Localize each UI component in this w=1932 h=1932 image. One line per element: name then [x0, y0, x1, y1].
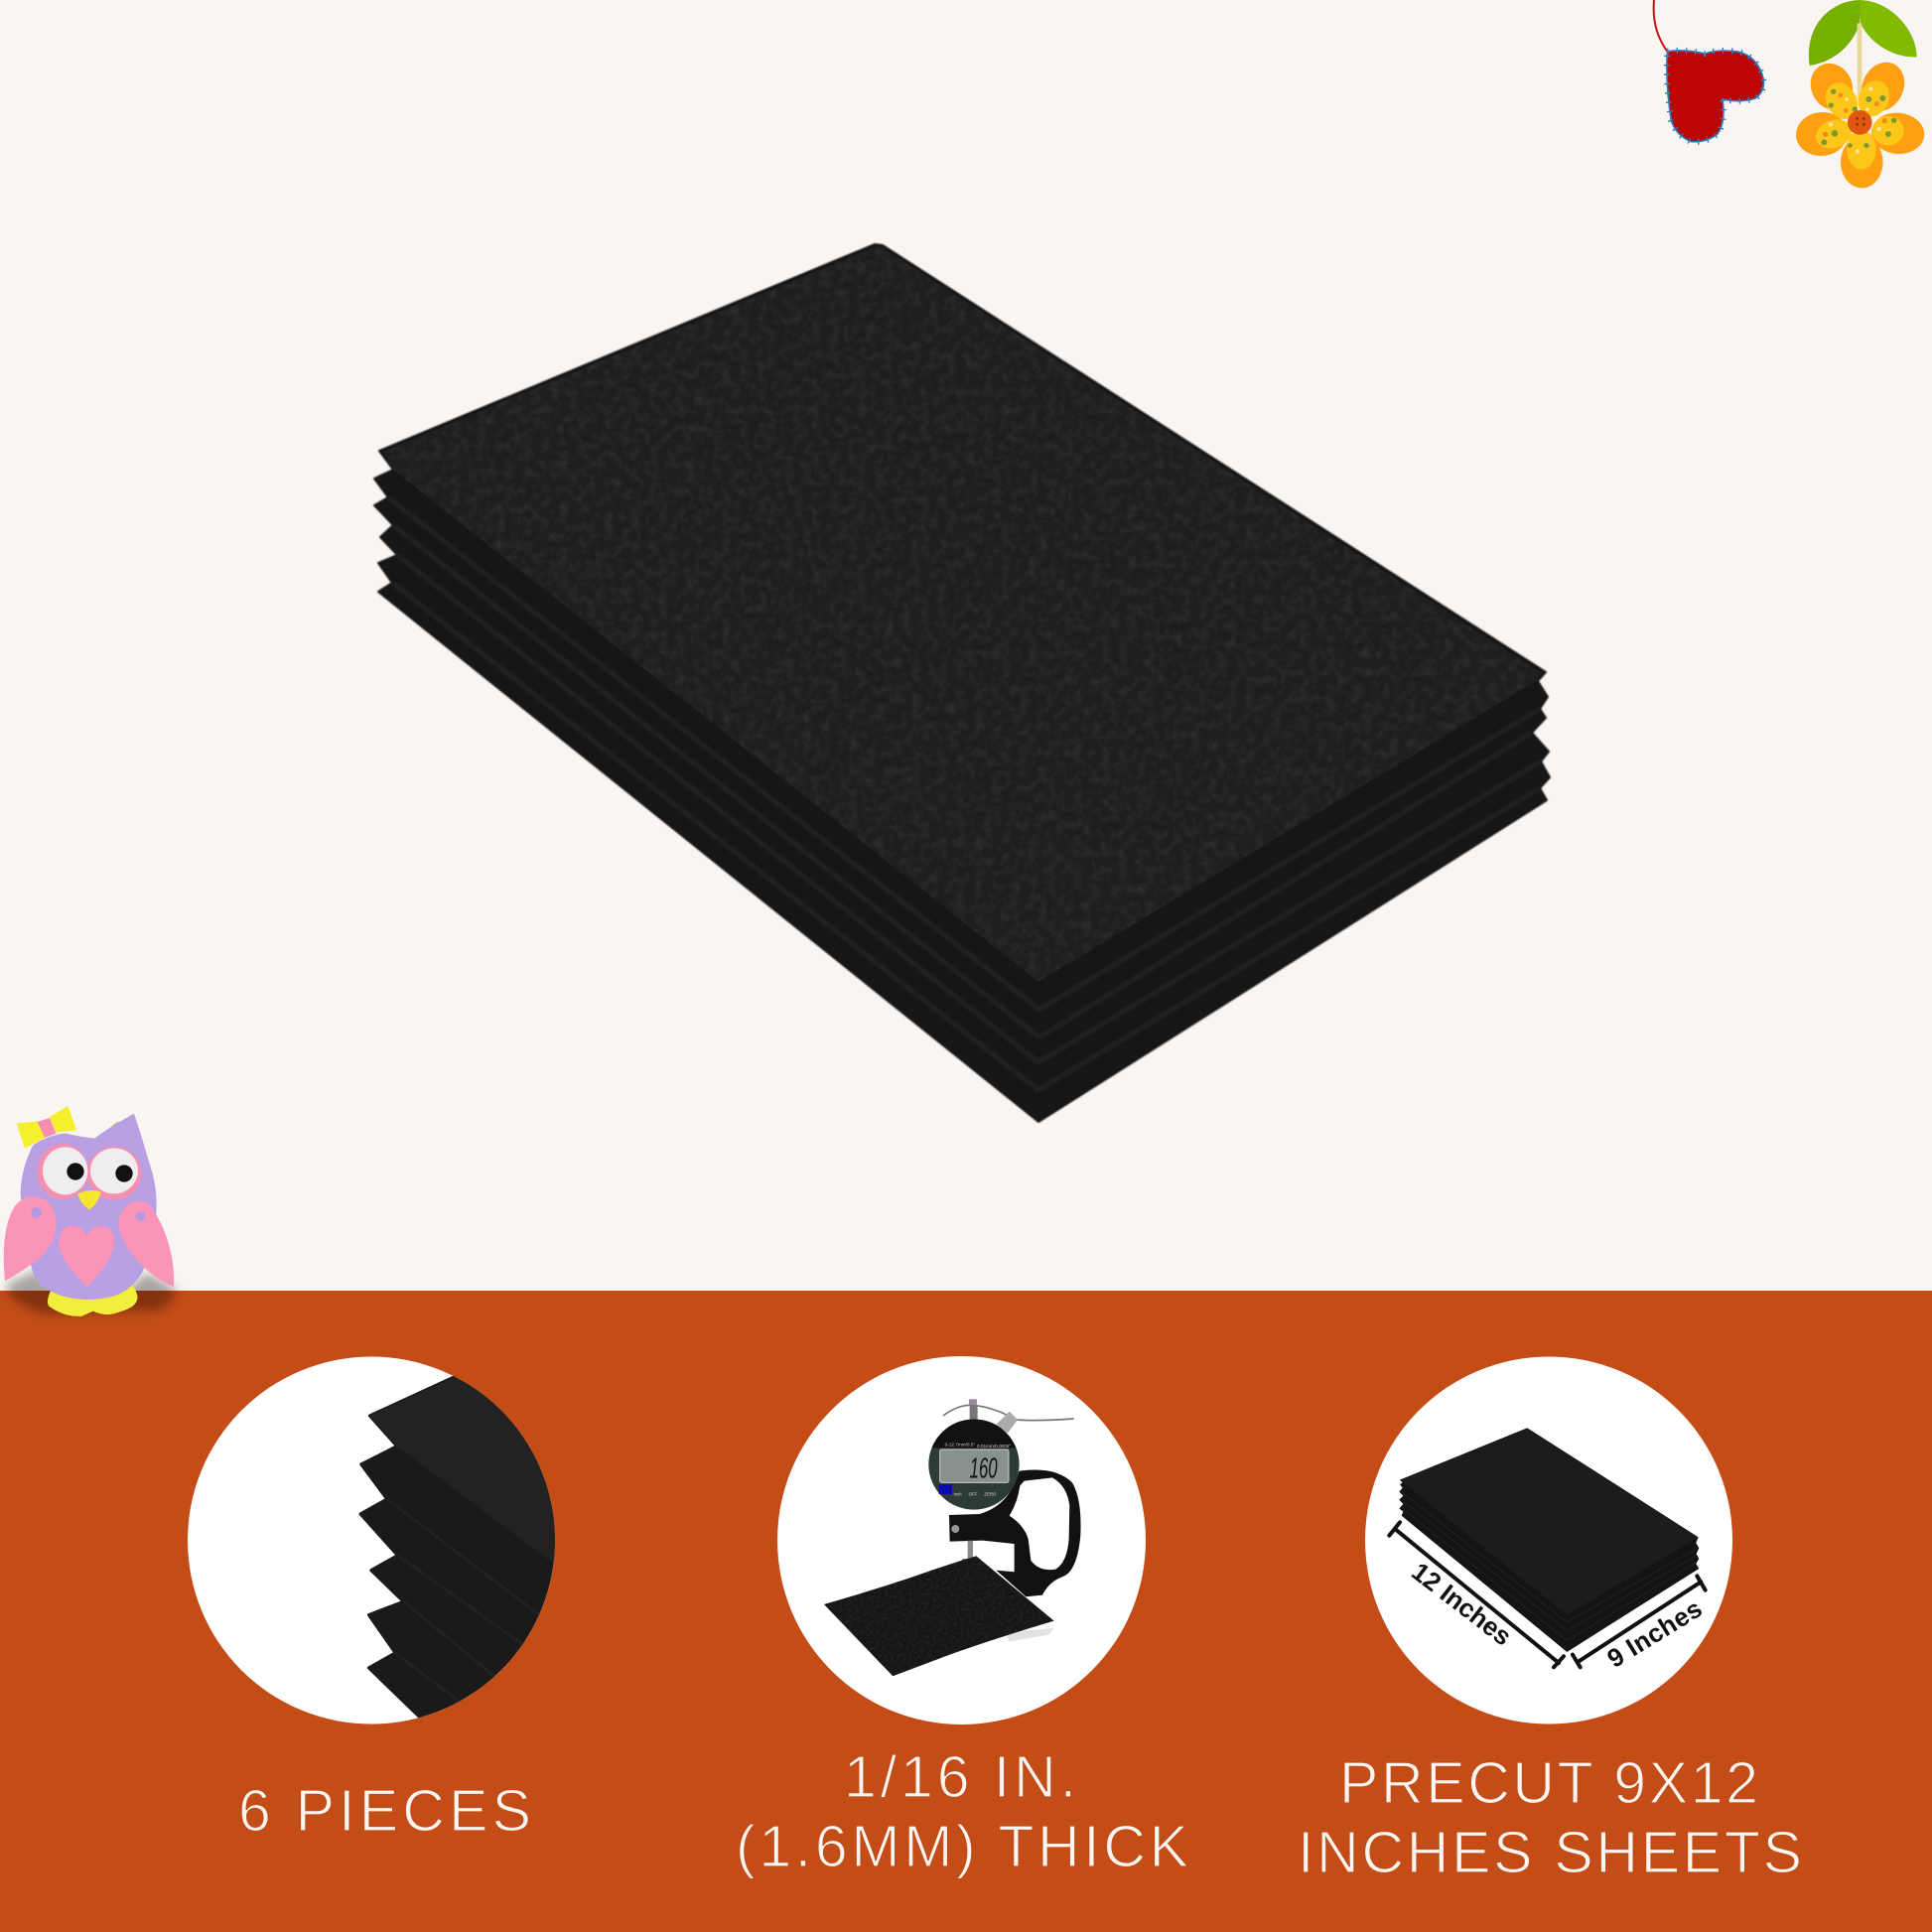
- panel: 6 pieces circle: [188, 1356, 555, 1724]
- panel: size circle: [1365, 1356, 1732, 1724]
- caption: thickness: 1/16 IN.: [844, 1744, 1076, 1810]
- icon: digital thickness gauge on felt: ZERO: [984, 1492, 997, 1497]
- icon: digital thickness gauge on felt: 0.01mm/0.0005": [977, 1444, 1011, 1449]
- dimension: 12 inches: 12 Inches: [1406, 1557, 1517, 1651]
- decoration: felt flower with leaves: [1794, 0, 1926, 188]
- icon: digital thickness gauge on felt: 0-12.7mm/0.5": [945, 1443, 975, 1448]
- dimension: 12 inches: [1389, 1522, 1564, 1667]
- decoration: red felt heart on string: [1654, 0, 1763, 142]
- caption: sheet size: [1298, 1750, 1802, 1885]
- panel: thickness gauge circle: [777, 1356, 1146, 1725]
- icon: digital thickness gauge on felt: [824, 1399, 1081, 1676]
- panel: orange feature band: [0, 1291, 1932, 1932]
- caption: thickness: (1.6MM) THICK: [736, 1814, 1188, 1879]
- icon: zoomed stack edge: [359, 1376, 555, 1718]
- caption: sheet size: PRECUT 9X12: [1339, 1750, 1758, 1816]
- caption: 6 pieces: 6 PIECES: [238, 1778, 531, 1844]
- dimension: 9 inches: 9 Inches: [1601, 1593, 1707, 1674]
- icon: mini stack with dimensions: [1389, 1428, 1707, 1674]
- caption: sheet size: INCHES SHEETS: [1298, 1820, 1802, 1885]
- dimension: 9 inches: [1573, 1576, 1707, 1674]
- decoration: felt owl: [4, 1106, 176, 1316]
- product image: stack of black felt sheets: [374, 244, 1550, 1122]
- icon: digital thickness gauge on felt: 160: [970, 1453, 998, 1485]
- icon: digital thickness gauge on felt: inch: [954, 1492, 962, 1497]
- icon: digital thickness gauge on felt: OFF: [969, 1492, 978, 1497]
- caption: thickness: [736, 1744, 1188, 1879]
